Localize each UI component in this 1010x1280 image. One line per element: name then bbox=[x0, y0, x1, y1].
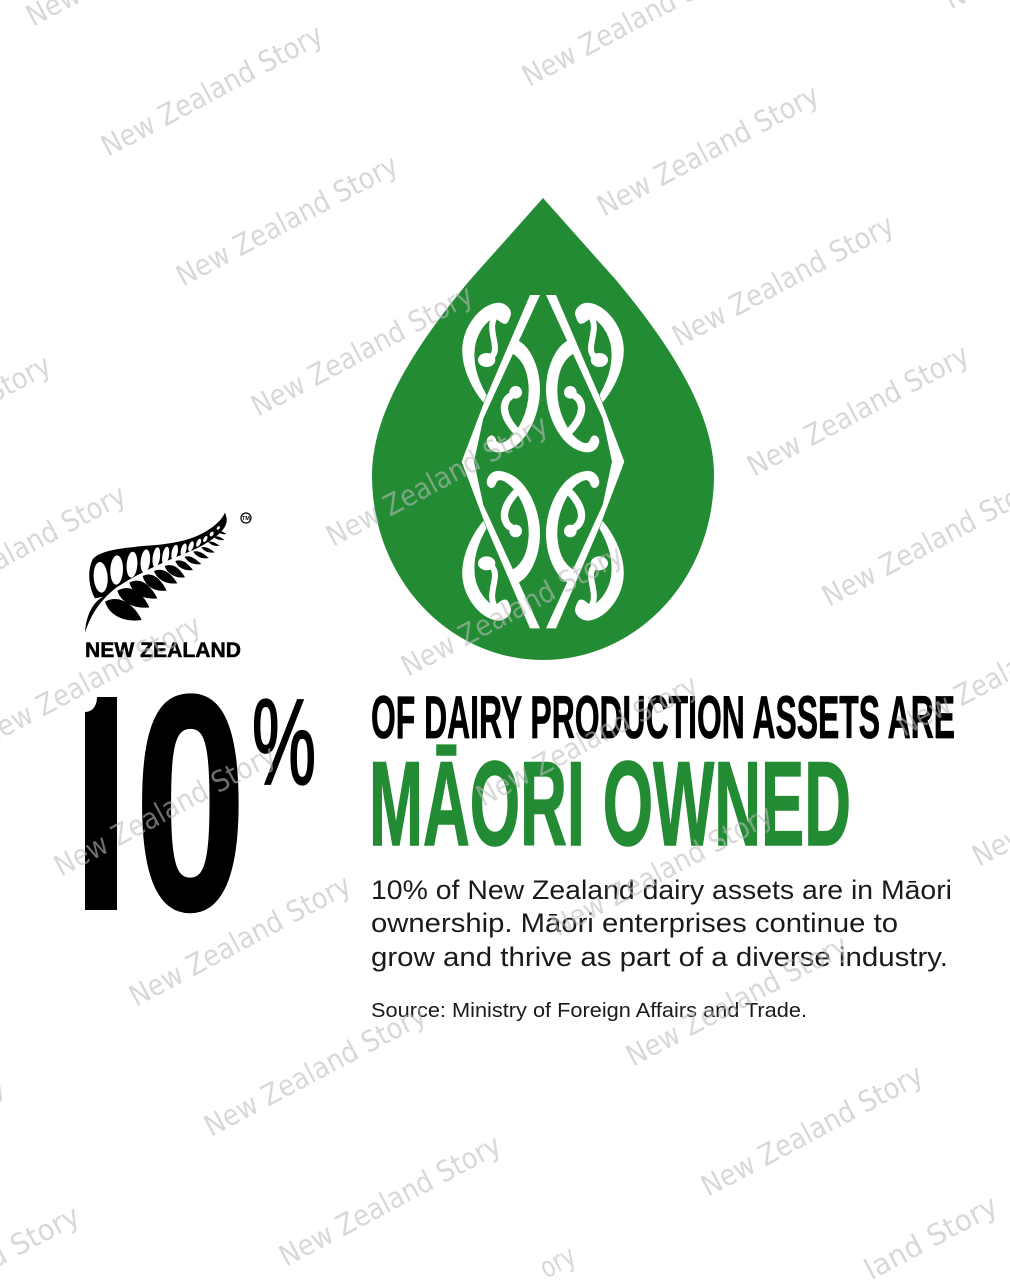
watermarks: New Zealand Story bbox=[545, 798, 778, 943]
percent sign: % bbox=[252, 674, 316, 810]
watermarks: New Zealand Story bbox=[741, 338, 974, 483]
watermarks: New Zealand Story bbox=[695, 1058, 928, 1203]
icon: fern bbox=[85, 513, 227, 633]
watermarks: New Zealand Story bbox=[666, 208, 899, 353]
watermarks: New Zealand Story bbox=[95, 18, 328, 163]
body paragraph bbox=[371, 875, 952, 972]
heading bbox=[369, 684, 955, 871]
watermarks: New Zealand Story bbox=[198, 998, 431, 1143]
watermarks: New Zealand Story bbox=[620, 928, 853, 1073]
watermarks: New Zealand Story bbox=[170, 148, 403, 293]
watermarks: New Zealand Story bbox=[320, 408, 553, 553]
watermarks: New Zealand Story bbox=[395, 538, 628, 683]
watermarks: New Zealand Story bbox=[591, 78, 824, 223]
koru pattern bbox=[462, 295, 624, 628]
trademark symbol bbox=[241, 513, 251, 523]
body paragraph: grow and thrive as part of a diverse industry. bbox=[371, 942, 948, 972]
trademark symbol: TM bbox=[242, 516, 250, 522]
watermarks: New Zealand Story bbox=[245, 278, 478, 423]
watermarks: New Zealand Story bbox=[123, 868, 356, 1013]
digit 0: 0 bbox=[135, 632, 246, 974]
watermarks: New Zealand Story bbox=[470, 668, 703, 813]
digit 1: 1 bbox=[20, 630, 167, 976]
watermarks: New Zealand Story bbox=[48, 738, 281, 883]
logo: silver fern with New Zealand wordmark bbox=[85, 513, 251, 662]
body paragraph: ownership. Māori enterprises continue to bbox=[371, 908, 898, 938]
source note: Source: Ministry of Foreign Affairs and Trade. bbox=[371, 1000, 807, 1022]
watermarks: New Zealand Story bbox=[273, 1128, 506, 1273]
big statistic: 10% bbox=[85, 693, 314, 914]
icon: green drop with koru pattern bbox=[372, 198, 714, 660]
body paragraph: 10% of New Zealand dairy assets are in Māori bbox=[371, 875, 952, 905]
wordmark: NEW ZEALAND bbox=[85, 638, 241, 662]
